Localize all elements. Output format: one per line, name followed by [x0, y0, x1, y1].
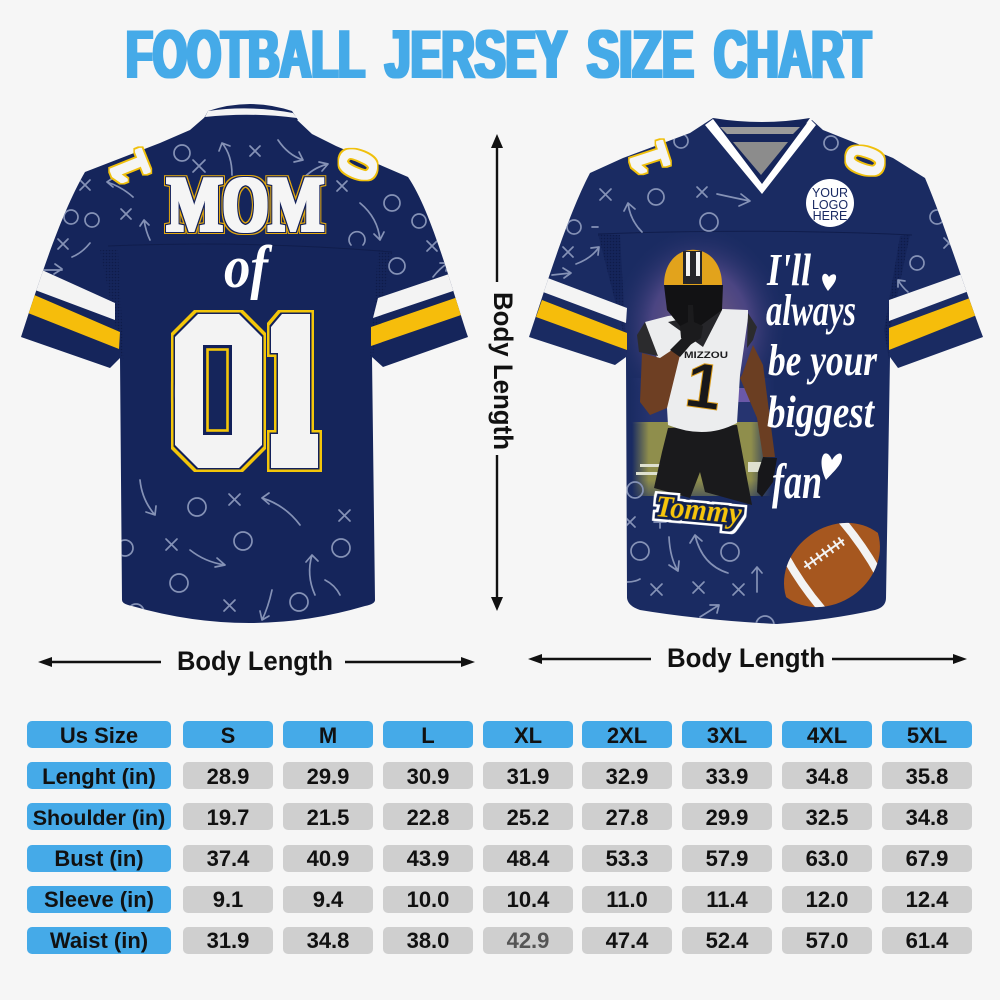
shoulder row: 32.5 — [806, 805, 848, 830]
sleeve row: 10.4 — [507, 887, 550, 912]
length row: 28.9 — [207, 764, 249, 789]
bust row: 48.4 — [507, 846, 550, 871]
sleeve row: 12.4 — [906, 887, 949, 912]
horizontal dimension back — [38, 646, 475, 676]
helmet — [664, 250, 723, 326]
length row: 33.9 — [706, 764, 748, 789]
sleeve row: 9.4 — [313, 887, 344, 912]
shoulder numbers front — [618, 136, 896, 183]
size table — [27, 721, 972, 954]
waist row: 34.8 — [307, 928, 349, 953]
length row: 29.9 — [307, 764, 349, 789]
length row: 35.8 — [906, 764, 948, 789]
sleeve row — [27, 886, 972, 913]
collar — [705, 118, 816, 194]
title: SIZE — [587, 16, 694, 92]
logo badge: LOGO — [812, 198, 848, 212]
title: CHART — [714, 16, 871, 92]
length row: Lenght (in) — [42, 764, 156, 789]
sleeve row: Sleeve (in) — [44, 887, 154, 912]
waist row: 42.9 — [507, 928, 549, 953]
script of: of — [224, 234, 272, 300]
waist row: 52.4 — [706, 928, 749, 953]
bust row: Bust (in) — [54, 846, 144, 871]
bust row: 67.9 — [906, 846, 948, 871]
script slogan — [766, 244, 878, 509]
header row: 5XL — [907, 723, 947, 748]
title: FOOTBALL — [126, 16, 365, 92]
jersey number: 1 — [681, 348, 726, 424]
mesh side panels — [100, 250, 392, 360]
length row: 30.9 — [407, 764, 449, 789]
jersey back — [21, 104, 468, 623]
vertical body length dimension: Body Length — [488, 292, 518, 450]
horizontal dimension front: Body Length — [667, 643, 825, 673]
bust row: 53.3 — [606, 846, 648, 871]
shoulder numbers front: 1 — [618, 136, 682, 181]
header row: 2XL — [607, 723, 647, 748]
bust row: 40.9 — [307, 846, 349, 871]
shoulder numbers back: 1 — [98, 143, 162, 192]
shoulder row — [27, 803, 972, 830]
length row: 32.9 — [606, 764, 648, 789]
logo badge: YOUR — [812, 186, 848, 200]
shoulder row: 19.7 — [207, 805, 249, 830]
script slogan: biggest — [767, 386, 875, 437]
sleeve row: 11.0 — [606, 887, 648, 912]
bust row: 63.0 — [806, 846, 848, 871]
vertical body length dimension — [488, 134, 518, 611]
header row — [27, 721, 972, 748]
player — [637, 250, 777, 505]
name MOM: MOM — [167, 161, 324, 247]
shoulder row: 22.8 — [407, 805, 449, 830]
playbook pattern front — [552, 134, 954, 634]
script slogan: I'll — [766, 244, 811, 295]
sleeve row: 12.0 — [806, 887, 848, 912]
bust row: 57.9 — [706, 846, 748, 871]
jersey lettering: MIZZOU — [684, 350, 728, 361]
waist row: Waist (in) — [50, 928, 148, 953]
shoulder row: 21.5 — [307, 805, 349, 830]
football — [784, 522, 880, 608]
header row: S — [221, 723, 235, 748]
waist row — [27, 927, 972, 954]
waist row: 61.4 — [906, 928, 949, 953]
shoulder numbers front: 0 — [832, 138, 896, 183]
name sticker Tommy: Tommy — [654, 488, 743, 530]
header row: Us Size — [60, 723, 138, 748]
logo badge: HERE — [813, 209, 847, 223]
waist row: 38.0 — [407, 928, 449, 953]
waist row: 57.0 — [806, 928, 848, 953]
player photo background — [625, 243, 772, 496]
length row — [27, 762, 972, 789]
number 01 — [171, 281, 315, 505]
waist row: 31.9 — [207, 928, 249, 953]
header row: 4XL — [807, 723, 847, 748]
mesh side panels front — [598, 234, 910, 360]
shoulder row: Shoulder (in) — [33, 806, 165, 830]
title: JERSEY — [385, 16, 567, 92]
header row: 3XL — [707, 723, 747, 748]
horizontal dimension back: Body Length — [177, 646, 333, 676]
header row: M — [319, 723, 337, 748]
header row: L — [421, 723, 435, 748]
bust row — [27, 845, 972, 872]
shoulder numbers back: 0 — [325, 140, 390, 189]
number 01: 0 — [171, 282, 265, 505]
number 01: 1 — [278, 281, 310, 505]
sleeve stripes back — [28, 270, 464, 349]
horizontal dimension front — [528, 643, 967, 673]
sleeve row: 9.1 — [213, 887, 243, 912]
jersey front — [529, 118, 983, 634]
shoulder numbers back — [98, 140, 390, 192]
header row: XL — [514, 723, 542, 748]
shoulder row: 27.8 — [606, 805, 648, 830]
logo badge — [806, 179, 854, 227]
script slogan: fan — [772, 453, 822, 509]
length row: 31.9 — [507, 764, 549, 789]
bust row: 43.9 — [407, 846, 449, 871]
player arm and glove — [640, 350, 680, 415]
title — [126, 16, 871, 92]
script slogan: be your — [768, 336, 878, 385]
length row: 34.8 — [806, 764, 848, 789]
sleeve row: 11.4 — [706, 887, 749, 912]
shoulder row: 25.2 — [507, 805, 549, 830]
shoulder row: 29.9 — [706, 805, 748, 830]
waist row: 47.4 — [606, 928, 649, 953]
sleeve stripes front — [536, 273, 977, 350]
playbook pattern back — [44, 140, 448, 620]
shoulder row: 34.8 — [906, 805, 948, 830]
script slogan: always — [766, 286, 856, 335]
sleeve row: 10.0 — [407, 887, 449, 912]
bust row: 37.4 — [207, 846, 250, 871]
